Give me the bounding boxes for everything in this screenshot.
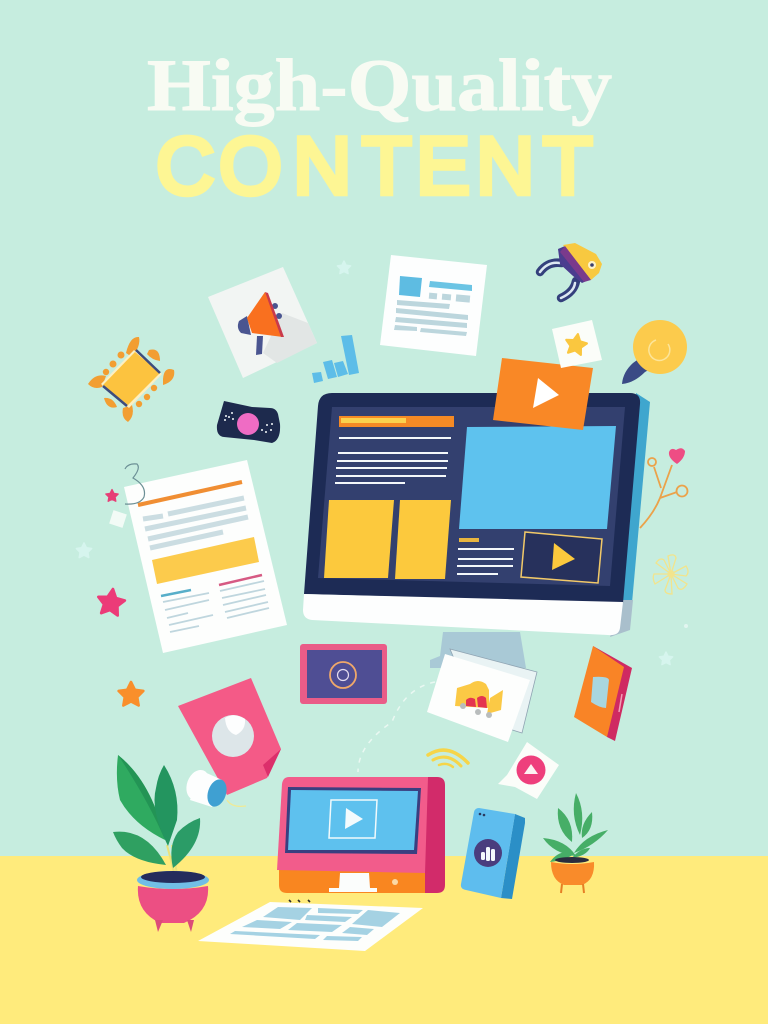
stand bbox=[329, 873, 377, 892]
star: pale top bbox=[337, 261, 351, 274]
column lines bbox=[163, 581, 269, 632]
pot soil bbox=[555, 857, 589, 863]
article card top bbox=[380, 255, 487, 356]
icon: chip bbox=[88, 337, 174, 422]
flower doodle bbox=[653, 555, 688, 594]
small label bbox=[459, 538, 479, 542]
yellow card left bbox=[324, 500, 394, 578]
play icon bbox=[345, 808, 363, 829]
monitor bezel bbox=[304, 393, 640, 603]
monitor chin bbox=[303, 594, 623, 635]
icon: lollipop magnifier bbox=[622, 320, 687, 384]
title line: High-Quality: High-Quality bbox=[147, 45, 612, 127]
screen bbox=[288, 790, 418, 850]
squiggle bbox=[227, 800, 246, 806]
megaphone card bbox=[208, 267, 317, 378]
binder rings bbox=[289, 900, 310, 902]
tablet bbox=[300, 644, 387, 704]
page bbox=[124, 460, 287, 653]
pot body bbox=[551, 862, 594, 885]
video thumbnail bbox=[521, 532, 602, 583]
leaf middle bbox=[154, 765, 177, 846]
pot feet bbox=[561, 884, 584, 893]
blue phone bbox=[461, 808, 525, 899]
text lines bbox=[143, 498, 248, 548]
headline bar bbox=[339, 416, 454, 427]
pot feet bbox=[155, 920, 163, 932]
star: orange bbox=[119, 682, 143, 706]
title bbox=[147, 45, 612, 211]
title line: CONTENT: CONTENT bbox=[156, 121, 592, 211]
pink document bbox=[178, 678, 281, 795]
blue panel bbox=[459, 426, 616, 529]
pot rim bbox=[137, 871, 209, 889]
small text block bbox=[457, 549, 514, 574]
orange phone bbox=[574, 646, 632, 741]
base bbox=[279, 870, 425, 893]
large plant bbox=[113, 755, 209, 932]
front bbox=[277, 777, 428, 873]
star: pale left bbox=[76, 543, 92, 557]
column headings bbox=[161, 590, 191, 596]
yellow block bbox=[152, 537, 259, 584]
dot bbox=[684, 624, 688, 628]
orange video card bbox=[493, 358, 593, 430]
small desktop monitor bbox=[277, 777, 445, 893]
leaf right bbox=[171, 818, 200, 868]
play frame bbox=[329, 800, 377, 838]
scroll cylinder bbox=[182, 767, 230, 809]
leaf far left bbox=[117, 755, 165, 840]
icon: game controller bbox=[217, 401, 280, 443]
heart branch bbox=[640, 448, 688, 528]
side panel bbox=[420, 777, 445, 893]
small plant bbox=[543, 793, 608, 893]
text lines bbox=[335, 438, 451, 483]
keyboard sheet bbox=[198, 900, 423, 951]
chin shadow bbox=[610, 600, 633, 637]
heading bar bbox=[138, 482, 242, 505]
screen frame bbox=[285, 787, 421, 854]
star: small pink bbox=[106, 490, 118, 501]
leaf left low bbox=[113, 832, 166, 865]
button bbox=[392, 879, 398, 885]
icon: megaphone bbox=[238, 292, 284, 355]
star: pink bbox=[96, 587, 126, 616]
photo card bbox=[427, 649, 537, 742]
star: pale right bbox=[659, 652, 673, 665]
pot body bbox=[138, 886, 208, 923]
triangle card bbox=[498, 742, 559, 799]
hook doodle bbox=[125, 464, 145, 504]
yellow card right bbox=[395, 500, 451, 579]
monitor stand bbox=[430, 632, 526, 668]
dashed path bbox=[358, 682, 435, 772]
star card bbox=[552, 320, 602, 368]
document left bbox=[124, 460, 287, 653]
leaves bbox=[543, 793, 608, 862]
truck illustration bbox=[455, 681, 503, 718]
icon: wifi bbox=[428, 750, 468, 767]
monitor side bbox=[620, 393, 650, 603]
pot soil bbox=[141, 871, 205, 883]
icon: clamp bbox=[540, 243, 602, 298]
floor bbox=[0, 856, 768, 1024]
screen bbox=[318, 407, 625, 586]
stems bbox=[167, 845, 178, 880]
white square bbox=[109, 510, 127, 528]
bar chart icon bbox=[312, 335, 359, 383]
large monitor bbox=[303, 393, 650, 637]
